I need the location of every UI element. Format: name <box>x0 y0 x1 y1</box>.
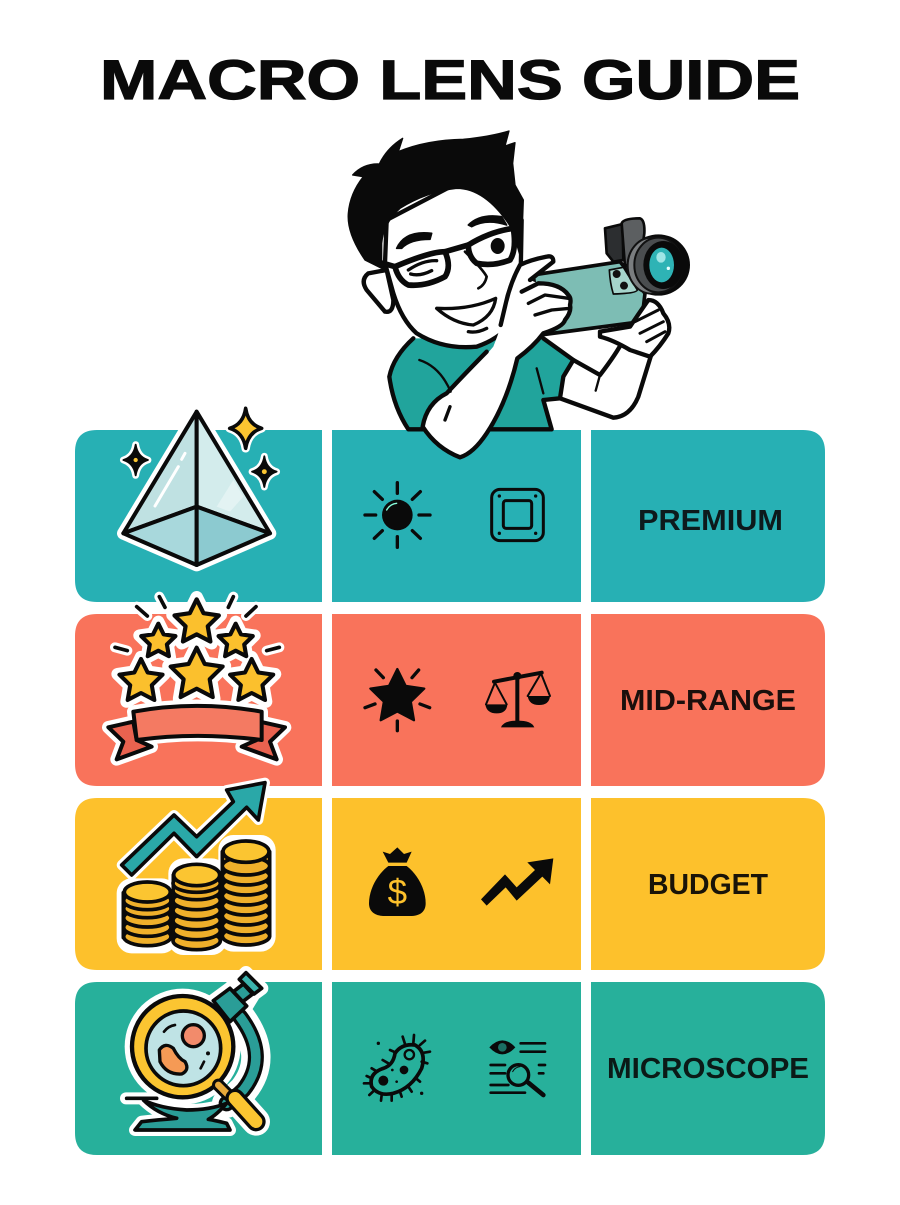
prism halo <box>123 412 270 565</box>
icon: microscope with magnifier <box>125 973 262 1130</box>
budget label cell <box>591 798 825 970</box>
far hand <box>600 300 669 357</box>
open eye <box>491 238 505 254</box>
mid-range label cell <box>591 614 825 786</box>
budget label: BUDGET <box>648 869 768 901</box>
microscope arm <box>227 1017 256 1103</box>
panel: budget row <box>75 798 825 970</box>
lens clip <box>605 218 644 267</box>
icon: coin stacks with rising arrow <box>117 783 276 955</box>
glasses <box>383 228 514 285</box>
cell specks <box>164 1025 204 1068</box>
icon: shining star <box>365 669 430 731</box>
icon: five stars with ribbon <box>108 597 285 759</box>
budget features cell <box>332 798 581 970</box>
face <box>385 180 522 347</box>
middle coin stack <box>173 864 220 950</box>
icon: inspect document <box>489 1040 545 1095</box>
microscope head <box>213 973 262 1022</box>
cell round <box>182 1025 204 1047</box>
left coin stack <box>123 882 171 946</box>
near hand fingers <box>445 295 570 420</box>
ribbon <box>108 706 285 759</box>
prism faces <box>123 412 270 565</box>
icon: sensor frame <box>492 489 543 541</box>
nose <box>465 252 487 288</box>
near arm outline <box>423 256 571 457</box>
premium image cell <box>75 430 322 602</box>
mouth <box>437 298 496 332</box>
premium label cell <box>591 430 825 602</box>
microscope label: MICROSCOPE <box>607 1053 809 1085</box>
panel: microscope row <box>75 982 825 1155</box>
shirt folds <box>419 360 600 393</box>
magnifier handle <box>235 1098 256 1122</box>
star halos <box>118 597 275 702</box>
star rays <box>115 597 279 651</box>
microscope halo <box>125 973 262 1130</box>
icon: bacterium <box>364 1035 430 1101</box>
icon: money bag: $ <box>388 873 407 912</box>
icon: glass prism with sparkles <box>123 408 277 565</box>
far hand fingers <box>635 310 665 342</box>
ear <box>364 270 393 312</box>
icon: balance scale <box>485 672 550 727</box>
winking eye <box>408 261 437 275</box>
sparkle top right <box>230 408 262 448</box>
microscope label cell <box>591 982 825 1155</box>
panel: premium row <box>75 430 825 602</box>
prism glints <box>155 453 185 506</box>
title: MACRO LENS GUIDE <box>100 48 800 111</box>
cell kidney <box>159 1045 187 1074</box>
panel: mid-range row <box>75 614 825 786</box>
right coin stack <box>222 841 270 945</box>
hair <box>348 131 523 270</box>
microscope features cell <box>332 982 581 1155</box>
far arm <box>560 340 652 418</box>
icon: money bag <box>369 847 426 916</box>
arrow <box>122 783 265 875</box>
eyebrows <box>397 216 507 248</box>
premium label: PREMIUM <box>638 505 783 537</box>
character: photographer with phone and macro lens <box>348 131 690 457</box>
mid-range label: MID-RANGE <box>620 685 796 717</box>
mid-range image cell <box>75 614 322 786</box>
near arm and hand fill <box>423 256 571 457</box>
sparkle bottom right <box>252 456 277 487</box>
microscope image cell <box>75 982 322 1155</box>
phone <box>533 262 645 335</box>
budget image cell <box>75 798 322 970</box>
sparkle left <box>123 445 148 475</box>
premium features cell <box>332 430 581 602</box>
macro lens <box>627 234 690 296</box>
mid-range features cell <box>332 614 581 786</box>
phone camera bump <box>609 267 637 294</box>
icon: rising trend arrow <box>481 858 553 906</box>
coins halo <box>117 835 276 955</box>
magnifier lens <box>132 996 233 1097</box>
gold stars <box>119 599 273 700</box>
microscope base <box>127 1098 230 1130</box>
shirt <box>389 338 573 429</box>
icon: sun <box>365 483 430 547</box>
magnifier collar <box>218 1085 228 1095</box>
